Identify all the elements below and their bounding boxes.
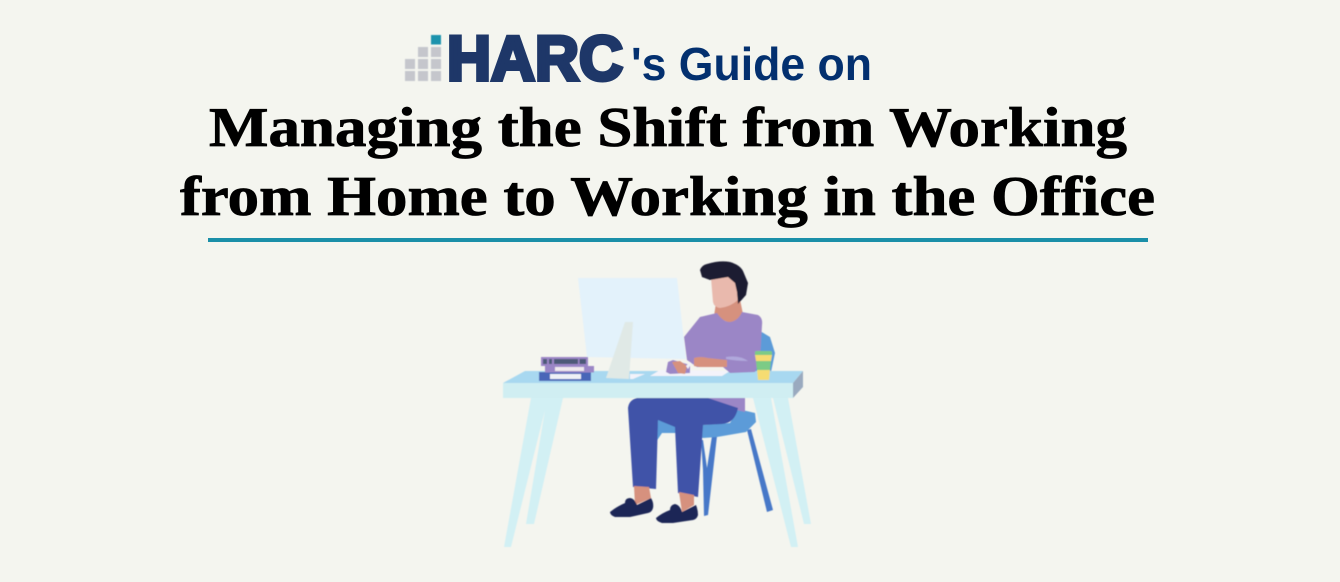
forearm — [666, 360, 690, 374]
sleeve highlight — [726, 356, 748, 361]
illustration: person working at desk — [503, 261, 811, 547]
face — [711, 275, 739, 308]
title — [180, 97, 1155, 228]
books — [539, 357, 594, 381]
person upper body — [666, 261, 762, 374]
icon: HARC logo squares — [405, 35, 441, 81]
header: logo and guide line — [405, 24, 872, 94]
monitor stand — [606, 322, 633, 379]
shoes — [610, 498, 698, 523]
hair — [700, 261, 748, 304]
pen — [686, 362, 691, 369]
hand — [672, 361, 687, 374]
logo wordmark: HARC — [447, 24, 623, 94]
shirt — [684, 312, 762, 373]
title underline — [208, 238, 1148, 242]
chair — [656, 331, 775, 516]
guide label: 's Guide on — [631, 38, 872, 90]
forearm skin — [694, 357, 727, 367]
monitor screen — [578, 278, 686, 359]
trousers — [628, 398, 738, 497]
title: from Home to Working in the Office — [180, 166, 1155, 228]
ankles — [634, 486, 694, 512]
title: Managing the Shift from Working — [209, 97, 1127, 159]
papers — [630, 370, 730, 379]
coffee cup — [755, 351, 772, 380]
neck — [714, 290, 743, 324]
shirt lower — [705, 398, 745, 412]
desk — [503, 371, 803, 398]
desk legs — [504, 398, 811, 547]
